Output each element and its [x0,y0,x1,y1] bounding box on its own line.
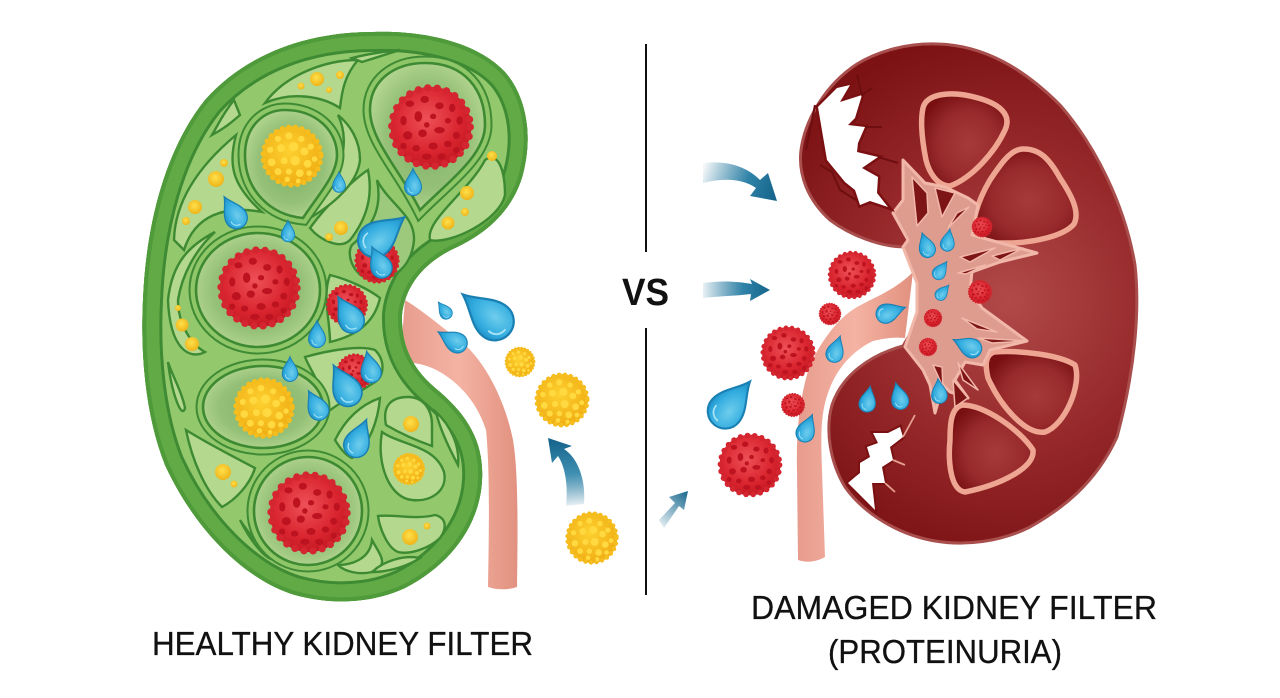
blue water drops in healthy kidney [215,168,422,461]
drops leaving healthy kidney [433,280,522,357]
yellow balls inside healthy kidney [235,126,424,484]
blue drops in damaged kidney [793,228,985,445]
damaged kidney outer body [800,44,1137,543]
red protein balls retained in healthy filter [220,87,471,552]
cells containing particles [196,63,485,565]
arrow: top curved toward damaged kidney [703,162,777,201]
dark slits in pelvis [912,177,1027,407]
yellow balls outside healthy kidney [506,348,617,563]
renal pelvis with branching arms [893,160,1037,413]
damaged kidney filter illustration [701,44,1137,562]
lower lobe chambers [949,352,1077,492]
divider line upper [645,44,647,252]
upper lobe chambers [922,94,1076,243]
VS label: VS [622,272,669,314]
arrow: lower diagonal [659,491,688,528]
large leaking water drop [701,370,763,436]
red protein balls in damaged kidney [919,217,992,356]
infographic: healthy vs damaged kidney filter [142,32,1156,670]
arrow: middle toward damaged kidney [703,279,770,301]
lower crack [848,415,915,510]
divider line lower [645,328,647,595]
red protein balls leaking [720,252,875,495]
green channels and chambers [168,50,505,573]
subheading: proteinuria: (PROTEINURIA) [828,633,1062,670]
upper crack [806,75,898,207]
healthy ureter tube [400,300,518,589]
heading: healthy kidney filter: HEALTHY KIDNEY FILTER [152,625,533,662]
arrow: curved upward [548,438,584,506]
yellow lipid dots [175,71,497,545]
heading: damaged kidney filter: DAMAGED KIDNEY FILTER [751,589,1157,626]
healthy kidney filter illustration [142,32,617,601]
healthy kidney outer capsule [142,32,528,601]
damaged ureter tube [797,272,913,562]
